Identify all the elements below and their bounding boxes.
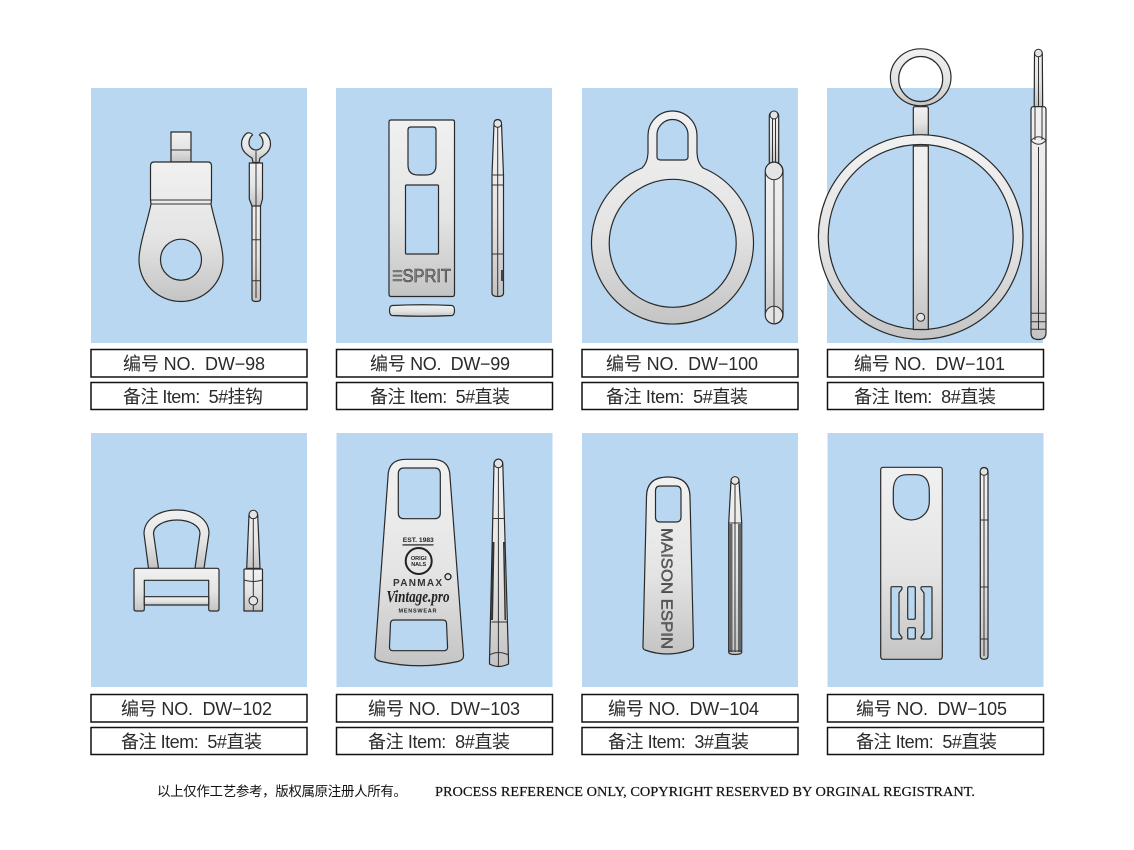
icon: DW-101 puller side <box>1031 49 1046 339</box>
label: DW-98 item <box>91 382 307 410</box>
icon: DW-101 ring puller front <box>818 49 1023 339</box>
logo: ESPRIT: SPRIT <box>402 266 451 286</box>
label: DW-104 number <box>582 694 798 722</box>
label: DW-98 item: 备注 Item: 5#挂钩 <box>123 387 263 407</box>
icon: DW-103 puller side <box>490 459 508 666</box>
panel: DW-105 <box>828 433 1044 687</box>
panel: DW-102 <box>91 433 307 687</box>
icon: DW-99 puller front <box>389 120 454 296</box>
icon: DW-104 puller front <box>643 477 694 654</box>
label: DW-98 number <box>91 350 307 377</box>
logo: PANMAX Vintage pro: EST. 1983 <box>403 537 434 544</box>
label: DW-102 number <box>91 694 307 722</box>
icon: DW-102 slider front <box>134 510 219 611</box>
logo: PANMAX Vintage pro: PANMAX <box>393 578 442 589</box>
logo: PANMAX Vintage pro: Vintage.pro <box>386 587 450 606</box>
label: DW-103 item: 备注 Item: 8#直装 <box>368 732 510 752</box>
label: DW-103 number: 编号 NO. DW−103 <box>368 699 520 719</box>
panel: DW-98 <box>91 88 307 343</box>
label: DW-101 number: 编号 NO. DW−101 <box>854 354 1005 374</box>
label: DW-103 number <box>336 694 552 722</box>
icon: DW-99 puller side <box>492 120 504 296</box>
label: DW-104 item <box>582 728 798 754</box>
logo: PANMAX Vintage pro: NALS <box>411 562 427 568</box>
label: DW-100 number: 编号 NO. DW−100 <box>606 354 758 374</box>
logo: PANMAX Vintage pro: MENSWEAR <box>398 608 437 614</box>
label: DW-101 item <box>828 382 1044 410</box>
label: DW-99 item: 备注 Item: 5#直装 <box>370 387 510 407</box>
label: DW-102 item: 备注 Item: 5#直装 <box>121 732 262 752</box>
icon: DW-98 puller front <box>139 132 223 302</box>
footer note <box>157 783 975 800</box>
logo: PANMAX Vintage pro <box>386 537 451 614</box>
panel: DW-104 <box>582 433 798 687</box>
icon: DW-102 slider side <box>244 510 262 611</box>
label: DW-100 item: 备注 Item: 5#直装 <box>606 387 748 407</box>
panel: DW-99 <box>336 88 552 343</box>
icon: DW-104 puller side <box>729 477 742 654</box>
footer note: 以上仅作工艺参考，版权属原注册人所有。 <box>157 783 407 799</box>
logo: PANMAX Vintage pro: ORIGI <box>411 556 427 562</box>
label: DW-98 number: 编号 NO. DW−98 <box>123 354 265 374</box>
icon: DW-99 bottom view <box>390 305 454 316</box>
label: DW-105 number: 编号 NO. DW−105 <box>856 699 1007 719</box>
label: DW-100 item <box>582 382 798 410</box>
icon: DW-103 puller front <box>375 459 464 666</box>
label: DW-104 item: 备注 Item: 3#直装 <box>608 732 749 752</box>
label: DW-99 number <box>336 350 552 377</box>
panel: DW-103 <box>336 433 552 687</box>
icon: DW-98 puller side <box>242 133 270 302</box>
label: DW-99 item <box>336 382 552 410</box>
label: DW-99 number: 编号 NO. DW−99 <box>370 354 510 374</box>
label: DW-100 number <box>582 350 798 377</box>
footer note: PROCESS REFERENCE ONLY, COPYRIGHT RESERVED BY ORGINAL REGISTRANT. <box>435 785 975 800</box>
label: DW-104 number: 编号 NO. DW−104 <box>608 699 759 719</box>
label: DW-103 item <box>336 728 552 754</box>
panel: DW-100 <box>582 88 798 343</box>
logo: MAISON ESPIN: MAISON ESPIN <box>658 528 675 649</box>
label: DW-105 item <box>828 728 1044 754</box>
label: DW-102 number: 编号 NO. DW−102 <box>121 699 272 719</box>
icon: DW-105 puller front <box>881 467 942 659</box>
panel: DW-101 <box>818 49 1046 343</box>
icon: DW-100 ring puller side <box>765 111 783 324</box>
icon: DW-100 ring puller front <box>592 111 754 324</box>
label: DW-102 item <box>91 728 307 754</box>
label: DW-105 item: 备注 Item: 5#直装 <box>856 732 997 752</box>
icon: DW-105 puller side <box>980 468 988 659</box>
label: DW-101 number <box>828 350 1044 377</box>
label: DW-101 item: 备注 Item: 8#直装 <box>854 387 996 407</box>
label: DW-105 number <box>828 694 1044 722</box>
